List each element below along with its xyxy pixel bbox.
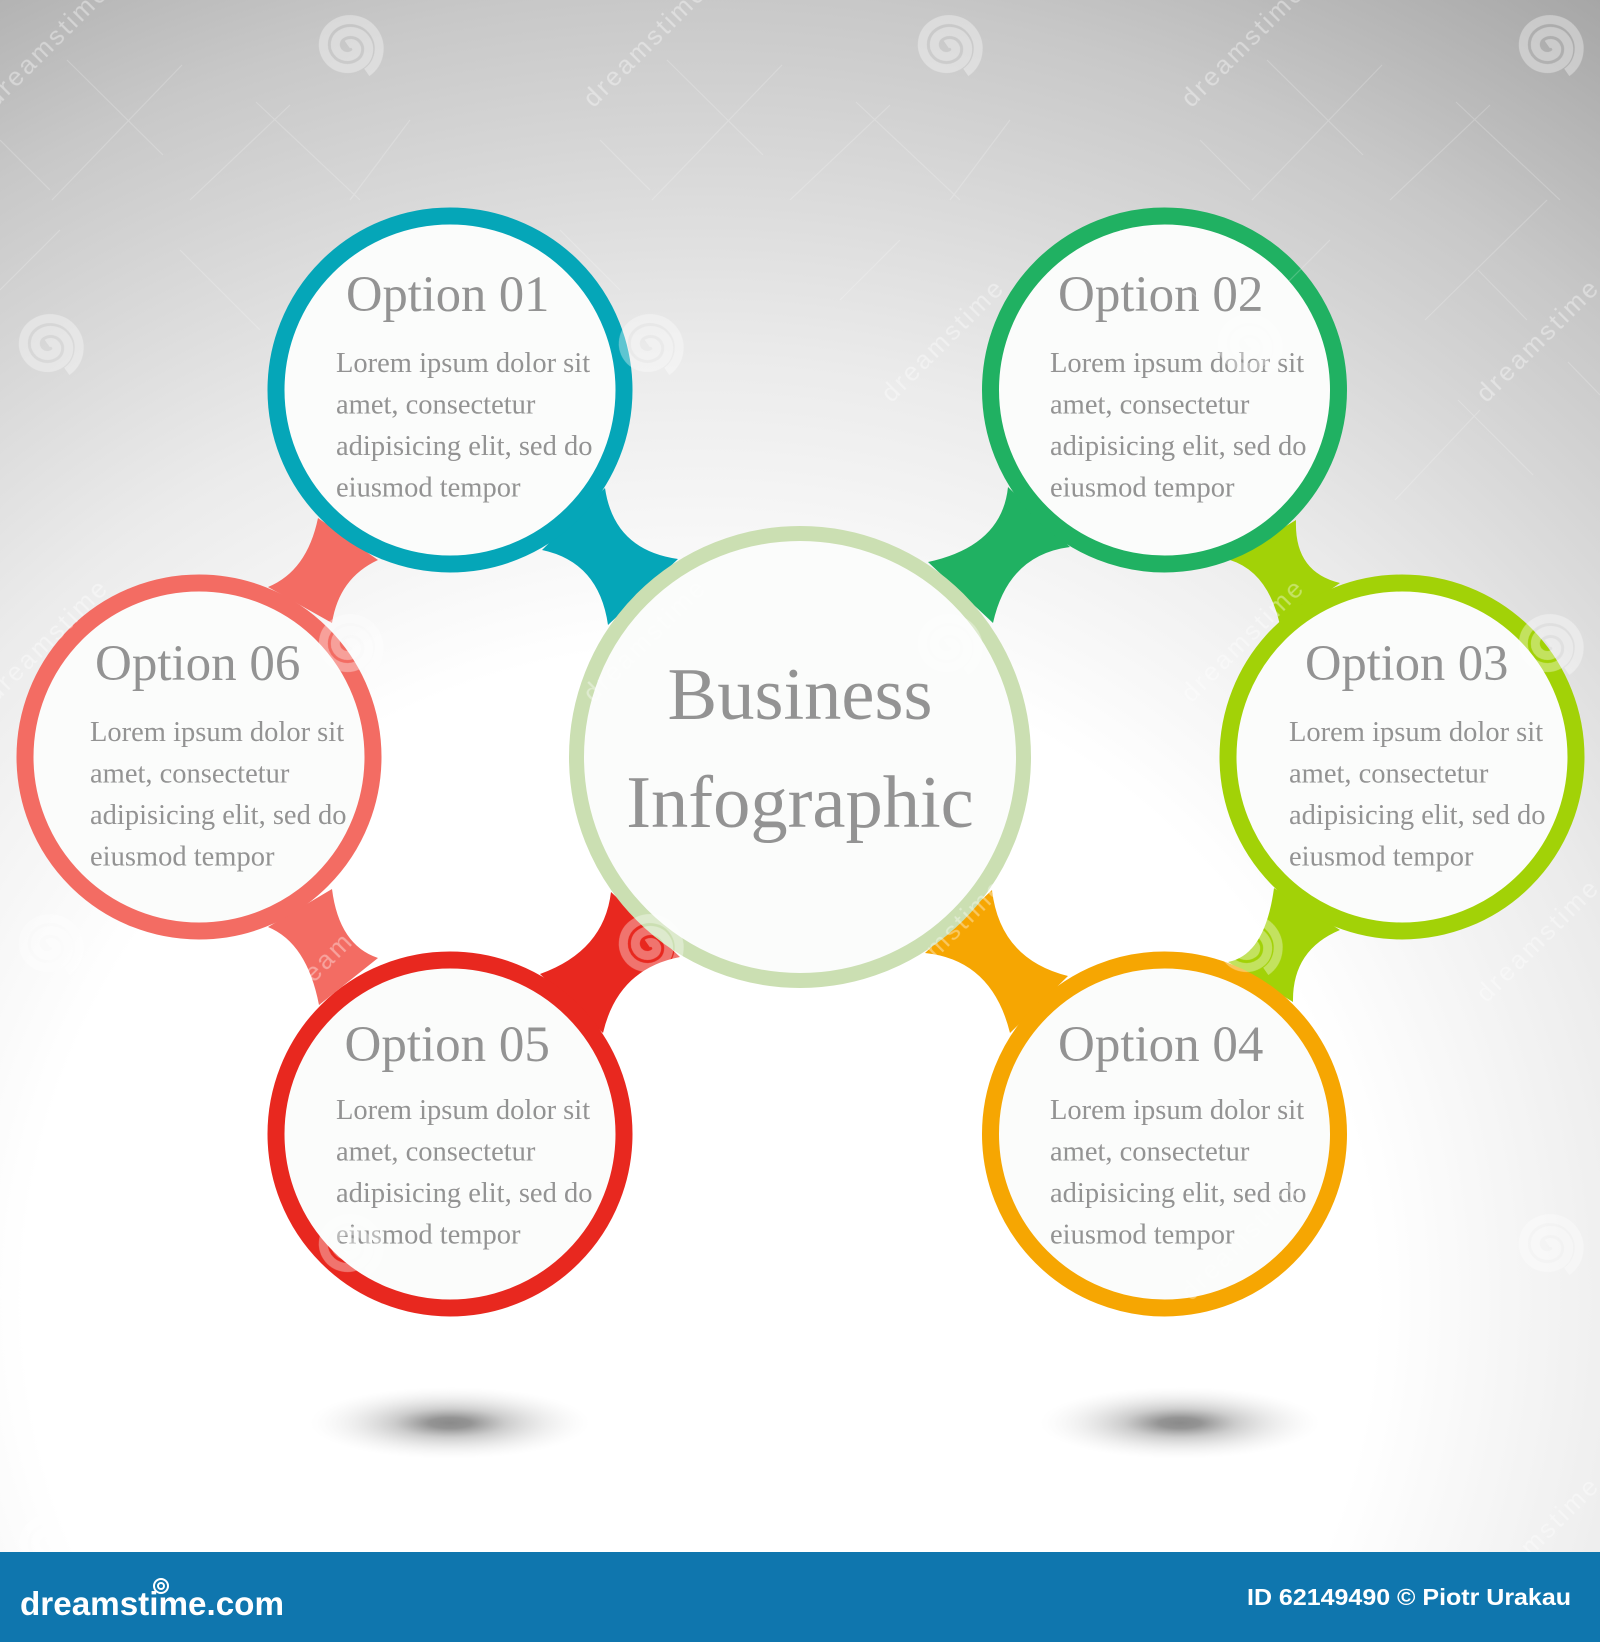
text block: option 04: eiusmod tempor [1050, 1220, 1235, 1250]
text block: option 05: amet, consectetur [336, 1136, 536, 1168]
panel: central circle [576, 534, 1024, 980]
text block: option 06: amet, consectetur [90, 758, 290, 790]
watermark text: dreamstime [1469, 873, 1600, 1008]
watermark text: dreamstime [576, 1171, 711, 1306]
text block: option 06: eiusmod tempor [90, 842, 275, 872]
watermark text: dreamstime [874, 873, 1009, 1008]
floating shadow right [1040, 1387, 1320, 1459]
text block: option 05: eiusmod tempor [336, 1220, 521, 1250]
watermark text: dreamstime [276, 873, 411, 1008]
watermark text: dreamstime [1469, 1471, 1600, 1606]
heading: option 03: Option 03 [1305, 635, 1508, 691]
text block: option 05: Lorem ipsum dolor sit [336, 1095, 590, 1126]
watermark text: dreamstime [1174, 573, 1309, 708]
footer band [0, 1552, 1600, 1642]
text block: option 04: adipisicing elit, sed do [1050, 1178, 1306, 1209]
text block: option 01: Lorem ipsum dolor sit [336, 348, 590, 379]
panel: option 02 [990, 216, 1338, 564]
text block: option 01: amet, consectetur [336, 390, 536, 420]
heading: option 06: Option 06 [95, 636, 300, 692]
text block: option 03: adipisicing elit, sed do [1289, 800, 1545, 831]
heading: option 05: Option 05 [344, 1017, 550, 1073]
panel: option 04 [990, 960, 1338, 1308]
connector shapes [268, 487, 1340, 1033]
text block: option 02: Lorem ipsum dolor sit [1050, 348, 1304, 379]
text block: option 02: amet, consectetur [1050, 390, 1250, 420]
heading: option 01: Option 01 [346, 266, 549, 322]
text block: option 01: eiusmod tempor [336, 472, 521, 504]
watermark text: dreamstime [1469, 273, 1600, 408]
connector: option 02 to option 03 [1230, 520, 1340, 625]
connector: option 06 to option 05 [268, 889, 378, 1005]
footer brand: dreamstime.com [20, 1585, 284, 1622]
heading: option 02: Option 02 [1058, 267, 1263, 323]
footer logo icon [154, 1579, 168, 1593]
panel: option 01 [276, 216, 624, 564]
text block: option 03: eiusmod tempor [1289, 842, 1474, 872]
connector: option 01 to centre [542, 488, 678, 625]
title: business infographic: Infographic [626, 762, 974, 844]
text block: option 03: amet, consectetur [1289, 758, 1489, 790]
heading: option 04: Option 04 [1058, 1017, 1263, 1073]
text block: option 03: Lorem ipsum dolor sit [1289, 717, 1543, 748]
connector: option 02 to centre [928, 487, 1070, 623]
text block: option 06: Lorem ipsum dolor sit [90, 717, 344, 748]
connector: option 04 to centre [925, 890, 1068, 1033]
watermark text: dreamstime [576, 573, 711, 708]
watermark text: dreamstime [874, 273, 1009, 408]
connector: option 06 to option 01 [268, 518, 378, 623]
text block: option 05: adipisicing elit, sed do [336, 1178, 592, 1209]
text block: option 04: amet, consectetur [1050, 1136, 1250, 1168]
text block: option 01: adipisicing elit, sed do [336, 431, 592, 462]
connector: option 03 to option 04 [1228, 888, 1340, 1002]
floating shadow left [310, 1387, 590, 1459]
panel: option 05 [276, 960, 624, 1308]
text block: option 04: Lorem ipsum dolor sit [1050, 1095, 1304, 1126]
watermark text: dreamstime [1174, 1171, 1309, 1306]
panel: option 03 [1228, 583, 1576, 931]
panel: option 06 [25, 583, 373, 931]
text block: option 02: adipisicing elit, sed do [1050, 431, 1306, 462]
text block: option 02: eiusmod tempor [1050, 472, 1235, 504]
text block: option 06: adipisicing elit, sed do [90, 800, 346, 831]
connector: option 05 to centre [540, 892, 680, 1033]
title: business infographic: Business [668, 654, 932, 736]
footer image id: ID 62149490 © Piotr Urakau [1247, 1584, 1571, 1610]
